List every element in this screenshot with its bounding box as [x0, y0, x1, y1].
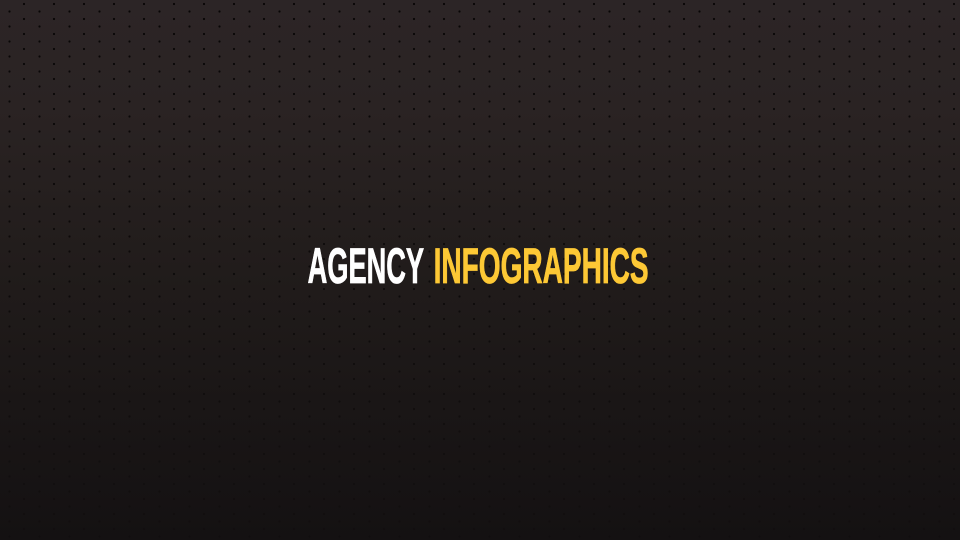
title: Agency Infographics: [308, 238, 649, 294]
title word: Agency: AGENCY: [308, 238, 424, 294]
title word: Infographics: INFOGRAPHICS: [434, 238, 649, 294]
dot pattern: [8, 3, 955, 418]
